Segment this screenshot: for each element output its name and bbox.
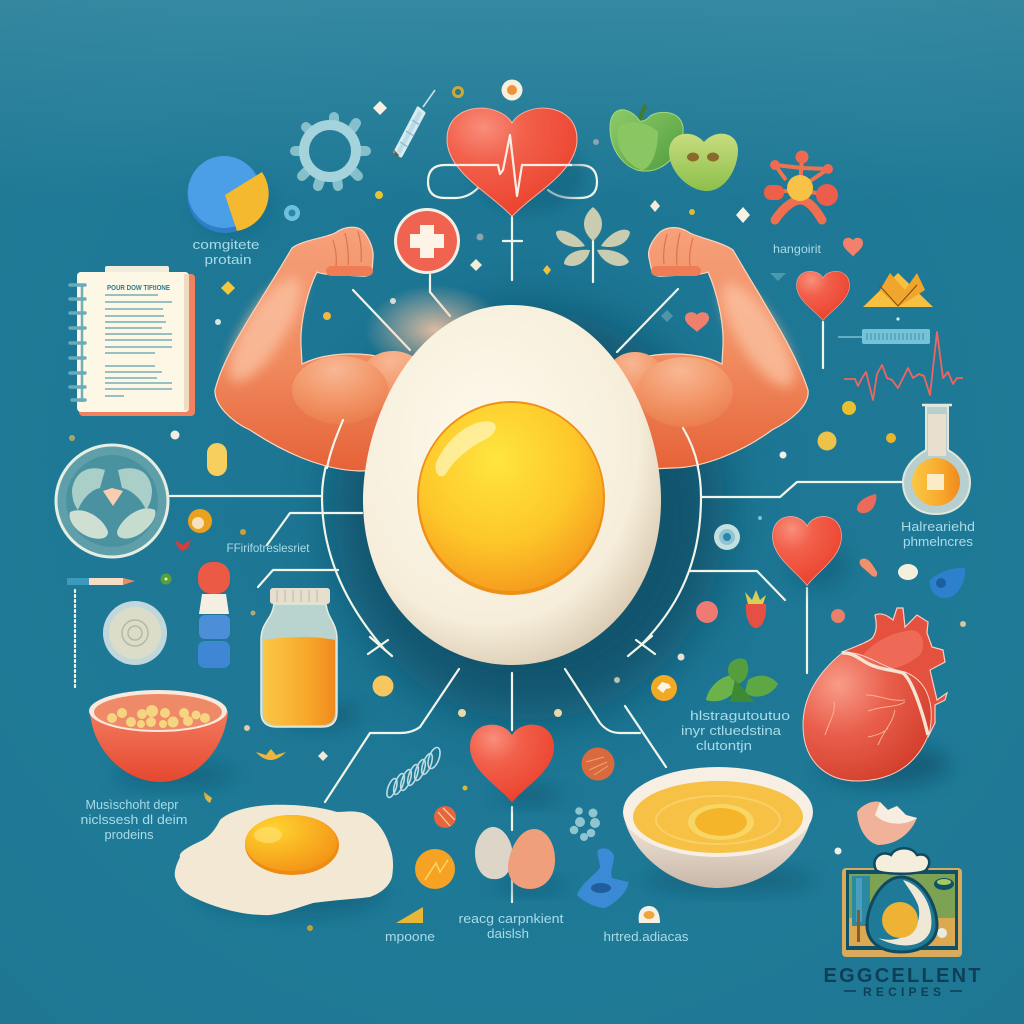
- label: protein line two: protain: [204, 252, 252, 267]
- icon: medical cross badge: [394, 208, 460, 274]
- logo subtitle: RECIPES: [863, 985, 941, 999]
- icon: pencil: [67, 578, 135, 585]
- label: complete protein: comgitete: [192, 237, 260, 252]
- icon: apple slice: [669, 134, 738, 191]
- small food items right: [696, 494, 965, 628]
- icon: yellow wedge: [396, 907, 423, 923]
- icon: ruler: [838, 329, 930, 344]
- icon: syringe: [395, 90, 435, 156]
- left caption: Musìschoht depr: [86, 797, 179, 812]
- icon: basil leaves: [706, 658, 778, 702]
- fried egg: [175, 805, 393, 917]
- icon: dot cluster: [570, 807, 600, 841]
- logo wordmark: EGGCELLENT: [824, 965, 980, 987]
- heart with stem: [796, 271, 850, 320]
- label: right caption: [681, 708, 790, 753]
- icon: coin: [103, 601, 167, 665]
- icon: top heart with pulse line: [428, 108, 597, 216]
- left caption: [80, 797, 188, 842]
- icon: right egg bowl: [623, 767, 815, 892]
- left caption: niclssesh dl deim: [80, 812, 188, 827]
- logo board: [842, 868, 962, 957]
- icon: small egg: [639, 906, 660, 923]
- icon: green bead: [160, 574, 172, 584]
- label: right caption: inyr ctluedstina: [681, 723, 782, 738]
- connector lines: [75, 217, 902, 902]
- icon: eggshell: [857, 802, 917, 845]
- icon: jar: [261, 588, 360, 729]
- heart mid right: [772, 517, 848, 589]
- icon: ring token: [714, 524, 740, 550]
- small decorative dots and sparkles: [69, 80, 966, 931]
- logo: Eggcellent Recipes: [824, 848, 980, 999]
- logo chef hat: [874, 848, 929, 874]
- icon: molecule: [764, 150, 838, 220]
- icon: pie chart: [187, 156, 269, 234]
- label: flask caption: Halreariehd: [901, 519, 975, 534]
- label: center bottom: [458, 911, 564, 941]
- left caption: prodeins: [104, 827, 154, 842]
- small heart: [843, 238, 863, 256]
- icon: orange ball: [582, 748, 614, 780]
- ECG line: [844, 332, 963, 400]
- icon: pill stack: [198, 562, 230, 668]
- label: right caption: clutontjn: [696, 738, 752, 753]
- icon: gear: [295, 117, 366, 186]
- notepad text lines: [105, 295, 172, 396]
- label: mpoone: mpoone: [385, 929, 435, 944]
- logo egg: [867, 877, 937, 952]
- icon: orange citrus: [415, 849, 455, 889]
- notepad heading: POUR DOW TIFtIONE: [107, 283, 170, 292]
- glow behind egg top: [365, 285, 505, 375]
- logo subtitle rules: [844, 990, 962, 992]
- label: hrtred: hrtred.adiacas: [604, 929, 689, 944]
- large anatomical heart: [803, 608, 950, 787]
- egg drop shadow: [335, 310, 725, 720]
- label: center bottom: reacg carpnkient: [458, 911, 564, 926]
- icon: left red bowl: [89, 690, 235, 787]
- caption: left middle: FFirifotreslesriet: [226, 541, 310, 555]
- icon: spring: [385, 746, 442, 799]
- left flexed arm: [215, 227, 427, 471]
- icon: blue shape: [577, 848, 628, 908]
- label: hangoint: hangoirit: [773, 242, 822, 256]
- heart near right arm: [685, 312, 709, 332]
- label: flask caption: [901, 519, 975, 549]
- icon: yellow capsule: [207, 443, 227, 476]
- icon: circle diagram: [56, 445, 168, 557]
- icon: yellow flower: [651, 675, 677, 701]
- icon: plant leaves: [556, 207, 630, 266]
- yolk: [417, 401, 605, 595]
- heart vessels: [842, 608, 947, 737]
- icon: ball near jar: [372, 676, 394, 696]
- heart aorta arch: [863, 630, 923, 669]
- right flexed arm: [605, 228, 808, 470]
- arm line tips over muscles: [327, 420, 698, 468]
- label: center bottom: daislsh: [487, 926, 529, 941]
- icon: red bow: [175, 539, 191, 551]
- icon: green pepper: [610, 105, 683, 171]
- icon: striped ball: [434, 806, 456, 828]
- icon: flask: [903, 405, 970, 514]
- icon: small flower ball: [188, 509, 212, 533]
- icon: notepad: [70, 266, 195, 416]
- label: flask caption: phmelncres: [903, 534, 974, 549]
- heart body: [803, 653, 931, 781]
- central lower heart: [470, 725, 560, 805]
- central egg: [363, 305, 661, 665]
- label: right caption: hlstragutoutuo: [690, 708, 790, 723]
- icon: yellow triangles: [863, 273, 933, 307]
- icon: two eggs: [475, 827, 566, 894]
